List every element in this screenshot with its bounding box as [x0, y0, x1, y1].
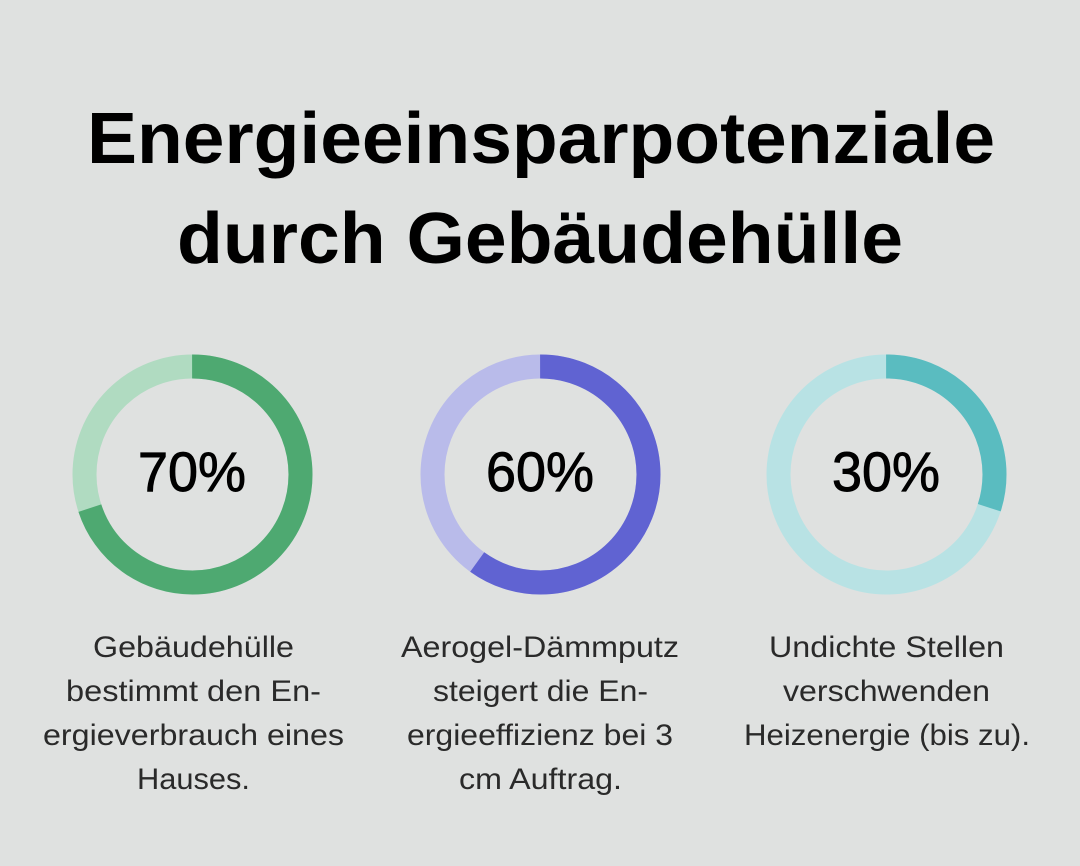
title — [87, 99, 995, 279]
description: Undichte Stellen: verschwenden — [783, 675, 990, 708]
description: Gebäudehülle — [43, 631, 344, 796]
value: 70%: 70% — [138, 440, 246, 503]
donut chart: 30% — [778, 366, 994, 582]
value: 30%: 30% — [832, 440, 940, 503]
description: Undichte Stellen: Heizenergie (bis zu). — [744, 719, 1030, 752]
description: Aerogel-Dämmputz: Aerogel-Dämmputz — [401, 631, 679, 664]
description: Aerogel-Dämmputz: cm Auftrag. — [459, 763, 622, 796]
donut chart: 70% — [84, 366, 300, 582]
panel: 60% Aerogel-Dämmputz — [401, 366, 679, 796]
description: Aerogel-Dämmputz: steigert die En- — [433, 675, 648, 708]
description: Gebäudehülle: bestimmt den En- — [66, 675, 321, 708]
panel: 30% Undichte Stellen — [744, 366, 1030, 752]
description: Undichte Stellen — [744, 631, 1030, 752]
description: Aerogel-Dämmputz — [401, 631, 679, 796]
value: 60%: 60% — [486, 440, 594, 503]
description: Undichte Stellen: Undichte Stellen — [769, 631, 1004, 664]
title: durch Gebäudehülle — [177, 199, 903, 279]
title: Energieeinsparpotenziale — [87, 99, 995, 179]
donut chart: 60% — [432, 366, 648, 582]
panel: 70% Gebäudehülle — [43, 366, 344, 796]
description: Gebäudehülle: ergieverbrauch eines — [43, 719, 344, 752]
description: Gebäudehülle: Hauses. — [137, 763, 250, 796]
description: Aerogel-Dämmputz: ergieeffizienz bei 3 — [407, 719, 673, 752]
description: Gebäudehülle: Gebäudehülle — [93, 631, 294, 664]
